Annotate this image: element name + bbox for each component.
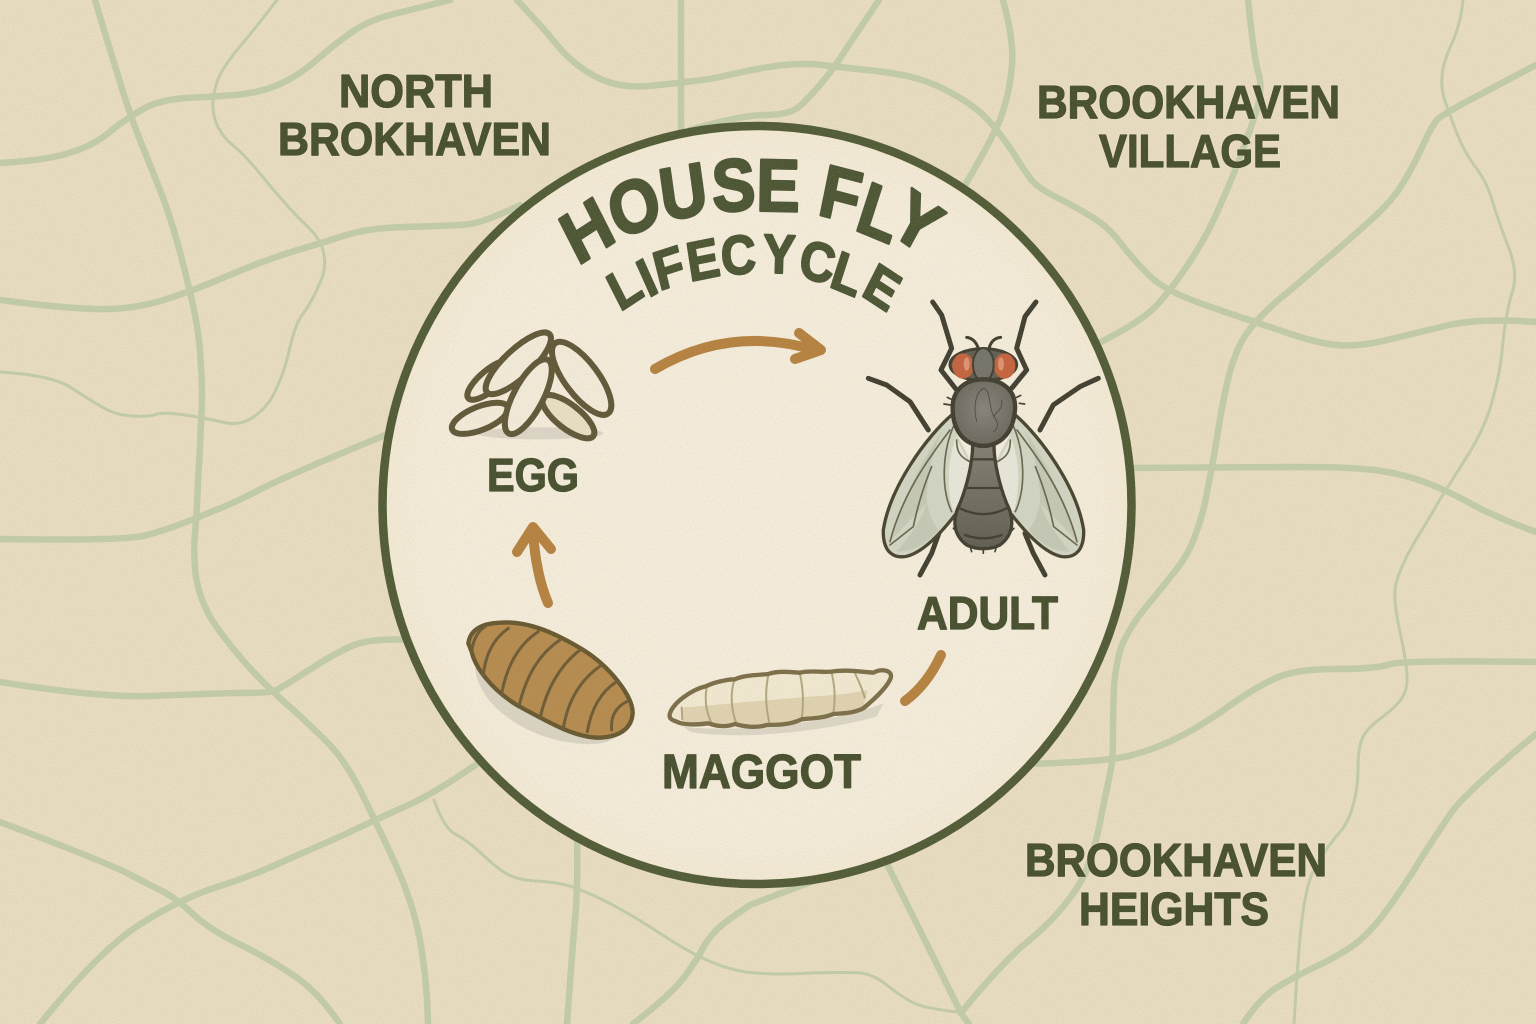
neighbourhood label: Brookhaven Village: VILLAGE	[1099, 125, 1281, 177]
neighbourhood label: Brookhaven Heights: HEIGHTS	[1079, 883, 1269, 935]
neighbourhood label: Brookhaven Village: BROOKHAVEN	[1037, 76, 1340, 128]
label: adult: ADULT	[917, 587, 1058, 639]
arrow: pupa to egg	[517, 527, 551, 603]
neighbourhood label: North Brokhaven: NORTH	[339, 65, 493, 117]
icon: eggs	[448, 324, 621, 446]
label: maggot: MAGGOT	[662, 746, 861, 799]
icon: pupa	[468, 622, 633, 744]
icon: adult house fly	[868, 302, 1098, 575]
fly legs and antennae	[868, 302, 1098, 575]
label: egg: EGG	[487, 449, 579, 501]
fly abdomen	[953, 445, 1014, 553]
panel: lifecycle circle	[382, 126, 1132, 884]
icon: maggot	[670, 670, 891, 735]
arrow: adult to maggot	[905, 655, 941, 701]
arrow: egg to adult	[655, 333, 821, 369]
title: Lifecycle: LIFECYCLE	[598, 223, 910, 323]
neighbourhood label: Brookhaven Village	[1037, 76, 1340, 177]
right wing	[995, 415, 1084, 557]
left wing	[883, 415, 972, 557]
fly thorax	[944, 379, 1025, 446]
neighbourhood label: North Brokhaven: BROKHAVEN	[278, 113, 551, 165]
neighbourhood label: Brookhaven Heights: BROOKHAVEN	[1025, 834, 1327, 886]
neighbourhood label: North Brokhaven	[278, 65, 551, 165]
neighbourhood label: Brookhaven Heights	[1025, 834, 1327, 935]
title: House Fly: HOUSE FLY	[548, 143, 955, 280]
fly head with eyes	[950, 348, 1017, 381]
